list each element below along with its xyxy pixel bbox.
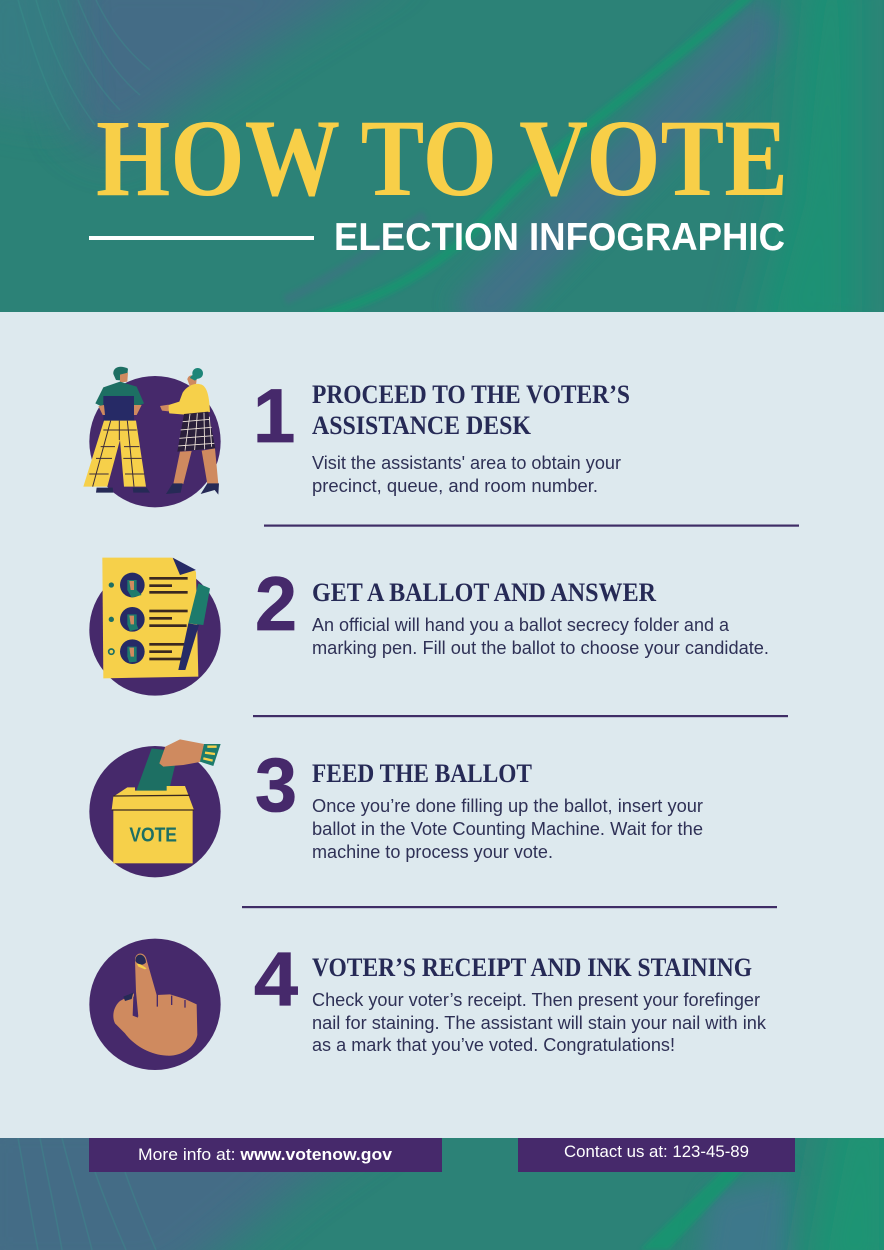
header background — [0, 0, 884, 312]
step 3 text: ballot in the Vote Counting Machine. Wait for the — [312, 819, 703, 839]
step 2 text: marking pen. Fill out the ballot to choose your candidate. — [312, 638, 769, 658]
step 3 heading: FEED THE BALLOT — [312, 759, 532, 788]
step 3 text: machine to process your vote. — [312, 842, 553, 862]
step 1 heading: PROCEED TO THE VOTER’S — [312, 380, 630, 409]
footer box: contact — [518, 1138, 795, 1172]
icon: two people talking — [83, 367, 221, 507]
icon: ballot box with hand — [89, 739, 221, 877]
step 3 text: Once you’re done filling up the ballot, insert your — [312, 796, 703, 816]
step 1 heading — [312, 380, 630, 440]
step 1 text: Visit the assistants' area to obtain your — [312, 453, 621, 473]
footer background — [0, 1138, 884, 1250]
step 1 text — [312, 453, 621, 496]
step 2 — [89, 558, 769, 696]
subtitle: ELECTION INFOGRAPHIC — [334, 216, 785, 259]
step 4 text — [312, 990, 767, 1055]
title: HOW TO VOTE — [96, 97, 788, 219]
icon: ballot paper and pen — [89, 558, 221, 696]
step 4 heading: VOTER’S RECEIPT AND INK STAINING — [312, 953, 752, 982]
footer box: contact: Contact us at: 123-45-89 — [564, 1142, 749, 1161]
step 4 — [89, 937, 767, 1070]
step number 4: 4 — [254, 937, 298, 1022]
step 4 text: as a mark that you’ve voted. Congratulations! — [312, 1035, 675, 1055]
content panel — [0, 312, 884, 1138]
step 3 text — [312, 796, 703, 862]
step number 2: 2 — [255, 562, 297, 647]
step 3 — [89, 739, 703, 877]
step number 1: 1 — [253, 374, 295, 459]
footer box: more info — [89, 1138, 442, 1172]
icon: ballot box with hand: VOTE — [129, 824, 177, 847]
icon: hand with inked finger — [89, 939, 221, 1070]
step 1 heading: ASSISTANCE DESK — [312, 411, 532, 440]
step 1 text: precinct, queue, and room number. — [312, 476, 598, 496]
step 1 — [83, 367, 630, 507]
step 2 text: An official will hand you a ballot secrecy folder and a — [312, 615, 730, 635]
step number 3: 3 — [255, 743, 297, 828]
step 2 heading: GET A BALLOT AND ANSWER — [312, 578, 656, 607]
subtitle rule — [89, 236, 314, 240]
step 4 text: Check your voter’s receipt. Then present your forefinger — [312, 990, 760, 1010]
step 4 text: nail for staining. The assistant will stain your nail with ink — [312, 1013, 767, 1033]
footer box: more info: More info at: www.votenow.gov — [138, 1145, 393, 1164]
step 2 text — [312, 615, 769, 658]
